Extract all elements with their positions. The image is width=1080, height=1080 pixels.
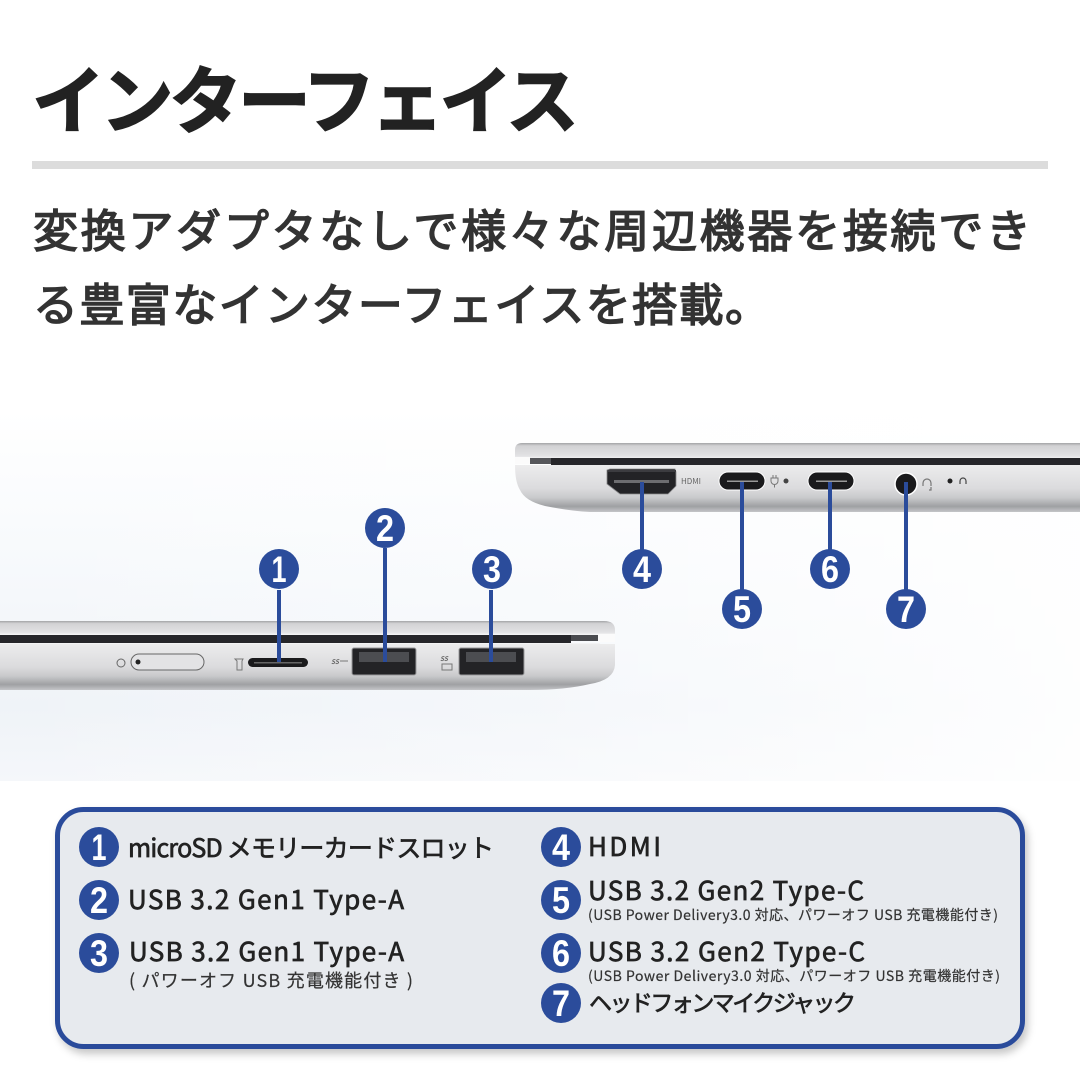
USB-A port 2 — [331, 648, 416, 675]
lid — [0, 621, 615, 635]
item 4: 4 — [552, 827, 570, 868]
USB-A port 2: SS — [331, 656, 340, 666]
HDMI legend: HDMI — [681, 476, 701, 487]
item 1: 1 — [92, 827, 106, 868]
chassis — [0, 644, 615, 690]
microSD slot — [235, 658, 308, 670]
lid — [515, 443, 1080, 459]
hinge gap — [551, 458, 1080, 465]
item 6: 6 — [552, 933, 570, 974]
item 3 — [79, 932, 413, 993]
marker 5: 5 — [733, 589, 751, 630]
headset icon — [923, 479, 931, 490]
marker 5 — [722, 589, 762, 630]
item 6: USB 3.2 Gen2 Type-C — [588, 932, 865, 969]
item 4 — [541, 827, 661, 868]
marker 2: 2 — [376, 508, 394, 549]
charging icon — [771, 475, 778, 488]
item 4: HDMI — [588, 827, 661, 864]
item 3: ( パワーオフ USB 充電機能付き ) — [129, 967, 413, 993]
marker 3 — [472, 549, 512, 590]
port: USB-C 5 — [719, 472, 765, 490]
marker 1: 1 — [272, 549, 286, 590]
leader lines — [279, 482, 906, 662]
item 5 — [541, 871, 998, 925]
title: インターフェイス — [32, 43, 579, 149]
item 5: USB 3.2 Gen2 Type-C — [588, 871, 864, 908]
USB-A port 3: SS — [440, 653, 449, 663]
item 5: (USB Power Delivery3.0 対応、パワーオフ USB 充電機能付き) — [588, 905, 998, 925]
marker 6: 6 — [821, 549, 839, 590]
item 2: 2 — [90, 880, 108, 921]
port: HDMI — [607, 469, 676, 494]
item 6: (USB Power Delivery3.0 対応、パワーオフ USB 充電機能付き) — [588, 966, 1000, 986]
marker 4: 4 — [633, 549, 651, 590]
hinge gap — [0, 635, 571, 643]
title divider — [32, 161, 1048, 169]
power button — [117, 654, 204, 670]
marker 2 — [365, 508, 405, 549]
item 3: 3 — [90, 933, 108, 974]
item 2: USB 3.2 Gen1 Type-A — [128, 880, 404, 917]
intro text: 変換アダプタなしで様々な周辺機器を接続でき — [33, 195, 1031, 260]
intro text: る豊富なインターフェイスを搭載。 — [33, 269, 770, 334]
intro text — [33, 195, 1031, 334]
photo background gradient — [0, 410, 1080, 781]
item 6 — [541, 932, 1000, 986]
laptop: right side ports — [515, 443, 1080, 512]
port: USB-C 6 — [808, 472, 854, 490]
item 5: 5 — [552, 880, 570, 921]
legend panel — [58, 810, 1022, 1046]
laptop: left side ports — [0, 621, 615, 690]
panel box — [58, 810, 1022, 1046]
marker 7: 7 — [897, 589, 915, 630]
item 3: USB 3.2 Gen1 Type-A — [129, 932, 404, 969]
chassis — [515, 465, 1080, 512]
item 1: microSD メモリーカードスロット — [128, 829, 494, 865]
item 7: ヘッドフォンマイクジャック — [589, 984, 856, 1018]
marker 1 — [259, 549, 299, 590]
callout markers on photo — [259, 508, 926, 630]
marker 7 — [886, 589, 926, 630]
port: audio jack — [895, 473, 917, 495]
marker 6 — [810, 549, 850, 590]
marker 3: 3 — [483, 549, 501, 590]
item 7: 7 — [552, 983, 570, 1024]
marker 4 — [622, 549, 662, 590]
USB-A port 3 — [440, 648, 524, 675]
